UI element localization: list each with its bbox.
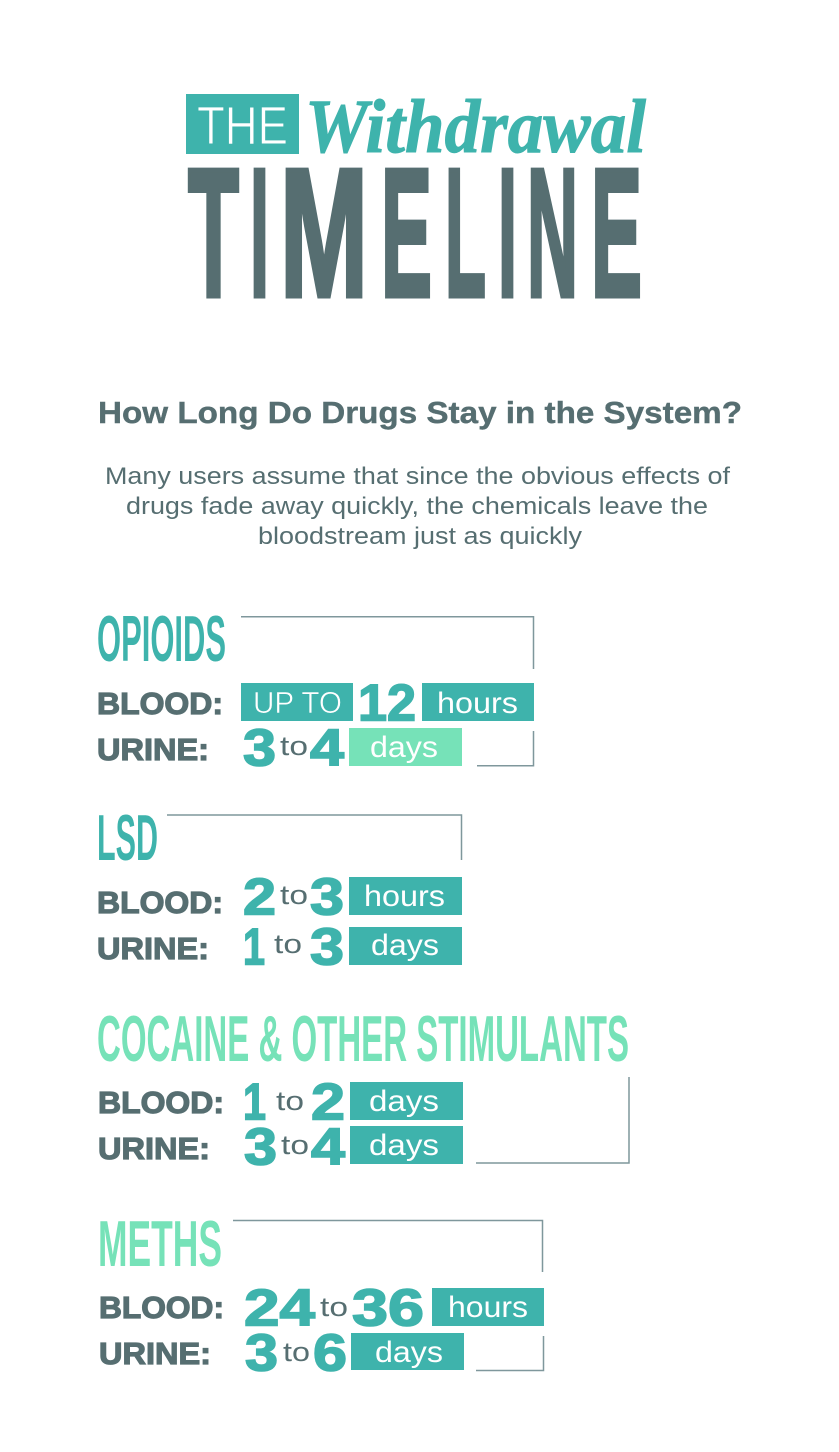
urine value: 1 to 3 days: days [371, 929, 439, 962]
urine value: 3 to 4 days: to [280, 731, 308, 761]
blood value: 1 to 2 days: days [369, 1085, 439, 1118]
label: blood: BLOOD: [97, 885, 223, 920]
intro text: Many users assume that since the obvious effects of [105, 463, 730, 490]
blood value: 2 to 3 hours: 3 [310, 868, 344, 926]
blood value: 24 to 36 hours: hours [448, 1291, 528, 1324]
panel: lsd: LSD [97, 801, 158, 874]
frame: cocaine [476, 1077, 629, 1163]
intro text: drugs fade away quickly, the chemicals leave the [126, 493, 708, 520]
blood value: 2 to 3 hours [243, 868, 462, 926]
label: urine: URINE: [97, 732, 209, 767]
blood value: 1 to 2 days: to [276, 1086, 304, 1116]
urine value: 3 to 6 days: to [283, 1337, 310, 1367]
urine value: 3 to 4 days [243, 720, 462, 778]
panel: lsd [97, 801, 462, 976]
label: blood: BLOOD: [99, 1290, 224, 1325]
text: E [591, 130, 642, 335]
urine value: 3 to 6 days: 3 [245, 1324, 278, 1382]
blood value: up to 12 hours: UP TO [253, 685, 342, 720]
label: blood: BLOOD: [97, 686, 223, 721]
subheading: How Long Do Drugs Stay in the System? [98, 395, 742, 430]
label: urine: URINE: [99, 1336, 211, 1371]
blood value: 1 to 2 days [243, 1074, 463, 1132]
frame: meths bottom [476, 1336, 544, 1370]
blood value: 24 to 36 hours: to [320, 1292, 348, 1322]
urine value: 1 to 3 days: 3 [310, 918, 344, 976]
label: urine: URINE: [97, 931, 209, 966]
title main: TIMELINE: I [498, 130, 517, 335]
urine value: 1 to 3 days: 1 [243, 918, 265, 976]
panel: opioids [97, 602, 534, 778]
intro text [105, 463, 730, 550]
blood value: 24 to 36 hours: 24 [244, 1280, 315, 1338]
frame: meths top [233, 1220, 542, 1272]
heading: meths: METHS [98, 1207, 222, 1280]
frame: lsd [167, 815, 462, 860]
urine value: 3 to 6 days [245, 1324, 464, 1382]
label: blood: BLOOD: [98, 1085, 224, 1120]
urine value: 3 to 4 days: 3 [244, 1118, 277, 1176]
urine value: 3 to 4 days: days [369, 1129, 439, 1162]
label: urine: URINE: [98, 1131, 210, 1166]
urine value: 1 to 3 days: to [274, 929, 302, 959]
title main: TIMELINE: L [445, 130, 486, 335]
blood value: 2 to 3 hours: hours [364, 880, 445, 913]
blood value: 2 to 3 hours: 2 [243, 868, 276, 926]
panel: meths [98, 1207, 544, 1382]
title main: TIMELINE: N [527, 130, 578, 335]
frame: opioids top [241, 617, 534, 669]
panel: cocaine and other stimulants [97, 1002, 629, 1176]
blood value: up to 12 hours: 12 [358, 674, 416, 732]
urine value: 3 to 4 days: 4 [311, 1118, 345, 1176]
urine value: 3 to 4 days: days [370, 731, 438, 764]
urine value: 3 to 4 days: 3 [243, 720, 276, 778]
blood value: 24 to 36 hours [244, 1280, 544, 1338]
blood value: 2 to 3 hours: to [280, 880, 308, 910]
title main: TIMELINE: I [250, 130, 269, 335]
blood value: up to 12 hours: hours [437, 687, 518, 720]
title main: TIMELINE: T [188, 130, 239, 335]
blood value: 24 to 36 hours: 36 [352, 1280, 424, 1338]
intro text: bloodstream just as quickly [258, 523, 582, 550]
title script: Withdrawal: Withdrawal [305, 85, 646, 169]
urine value: 3 to 4 days [244, 1118, 463, 1176]
title [186, 85, 646, 335]
title tag: THE: THE [197, 96, 288, 156]
urine value: 1 to 3 days [243, 918, 462, 976]
blood value: up to 12 hours [241, 674, 534, 732]
frame: opioids bottom [477, 731, 534, 766]
urine value: 3 to 4 days: to [281, 1130, 309, 1160]
urine value: 3 to 6 days: 6 [313, 1324, 347, 1382]
title main: TIMELINE: E [381, 130, 432, 335]
title main: TIMELINE: M [280, 130, 368, 335]
blood value: 1 to 2 days: 2 [311, 1074, 345, 1132]
urine value: 3 to 6 days: days [375, 1336, 443, 1369]
urine value: 3 to 4 days: 4 [310, 720, 344, 778]
panel: opioids: OPIOIDS [97, 602, 226, 675]
blood value: 1 to 2 days: 1 [243, 1074, 266, 1132]
